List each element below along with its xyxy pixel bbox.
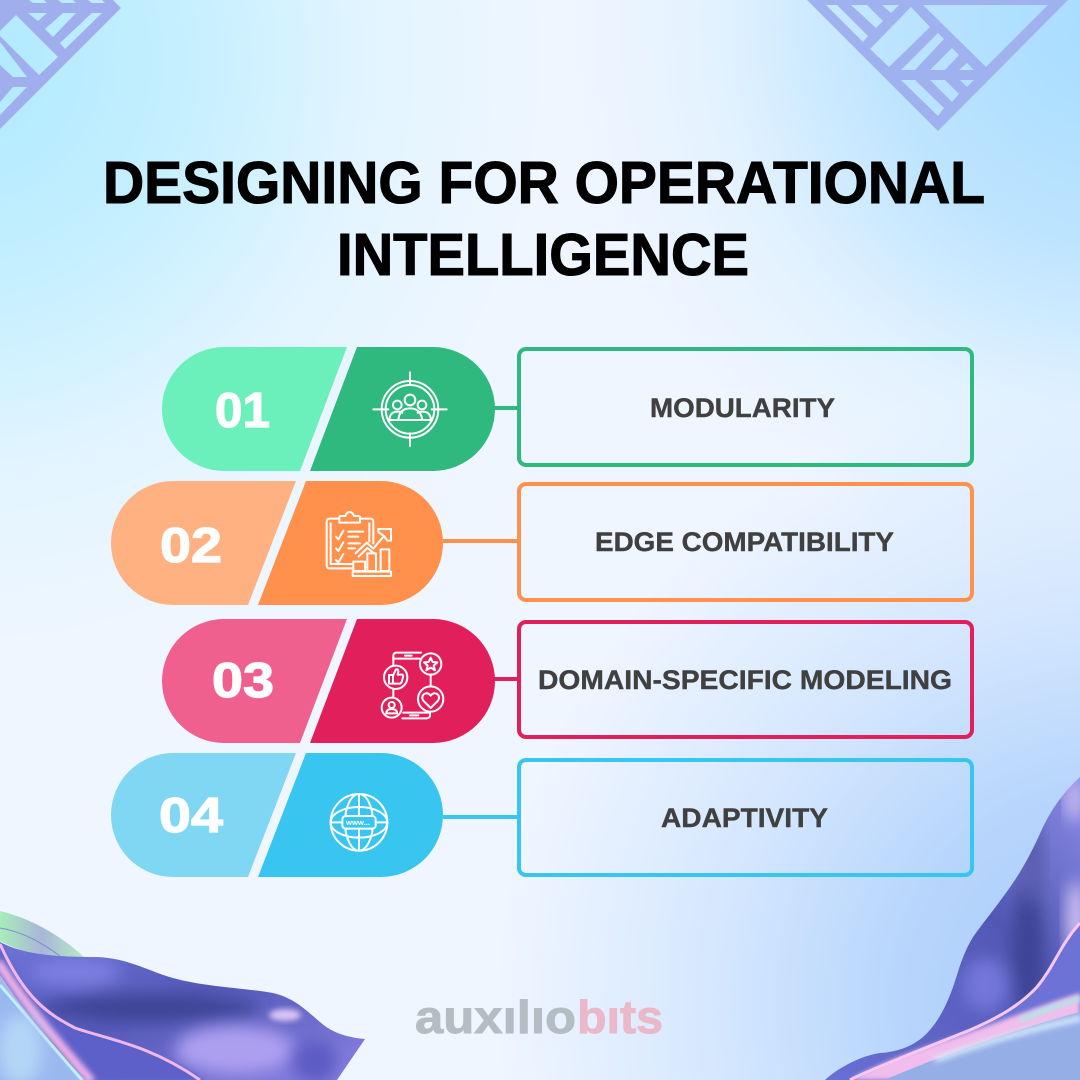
box: modularity: MODULARITY	[650, 393, 835, 423]
logo: auxiliobits	[415, 991, 663, 1043]
icon: phone with social reactions	[382, 653, 443, 718]
icon: target audience	[373, 372, 447, 446]
icon: globe with www	[331, 794, 387, 851]
icon: globe with www: www...	[345, 818, 370, 827]
box: modularity	[519, 349, 972, 465]
pill: step 04: 04	[159, 789, 223, 843]
decorative lattice: top left	[0, 0, 121, 129]
pill: step 01: 01	[215, 384, 270, 438]
title: DESIGNING FOR OPERATIONAL	[103, 150, 985, 216]
pill: step 04	[111, 753, 443, 877]
pill: step 02: 02	[160, 519, 222, 573]
connector: row 3	[494, 677, 519, 681]
pill: step 03: 03	[212, 654, 274, 708]
connector: row 4	[443, 815, 519, 819]
connector: row 1	[494, 406, 519, 410]
icon: clipboard with growth chart	[327, 512, 391, 576]
logo: auxiliobits: auxılıo	[415, 991, 576, 1043]
box: edge compatibility: EDGE COMPATIBILITY	[595, 527, 894, 557]
decorative wave: bottom right	[825, 777, 1080, 1080]
pill: step 02	[111, 481, 443, 605]
box: edge compatibility	[519, 484, 972, 600]
decorative wave: bottom left	[0, 911, 365, 1080]
title: INTELLIGENCE	[337, 222, 749, 288]
pill: step 03	[162, 619, 495, 743]
logo: auxiliobits: bıts	[577, 991, 663, 1043]
box: adaptivity: ADAPTIVITY	[661, 803, 828, 833]
box: domain-specific modeling	[519, 622, 972, 737]
decorative lattice: top right	[807, 0, 1068, 131]
connector: row 2	[443, 539, 519, 543]
box: adaptivity	[519, 760, 972, 875]
title	[103, 150, 985, 288]
box: domain-specific modeling: DOMAIN-SPECIFIC MODELING	[538, 665, 952, 695]
pill: step 01	[162, 347, 495, 471]
